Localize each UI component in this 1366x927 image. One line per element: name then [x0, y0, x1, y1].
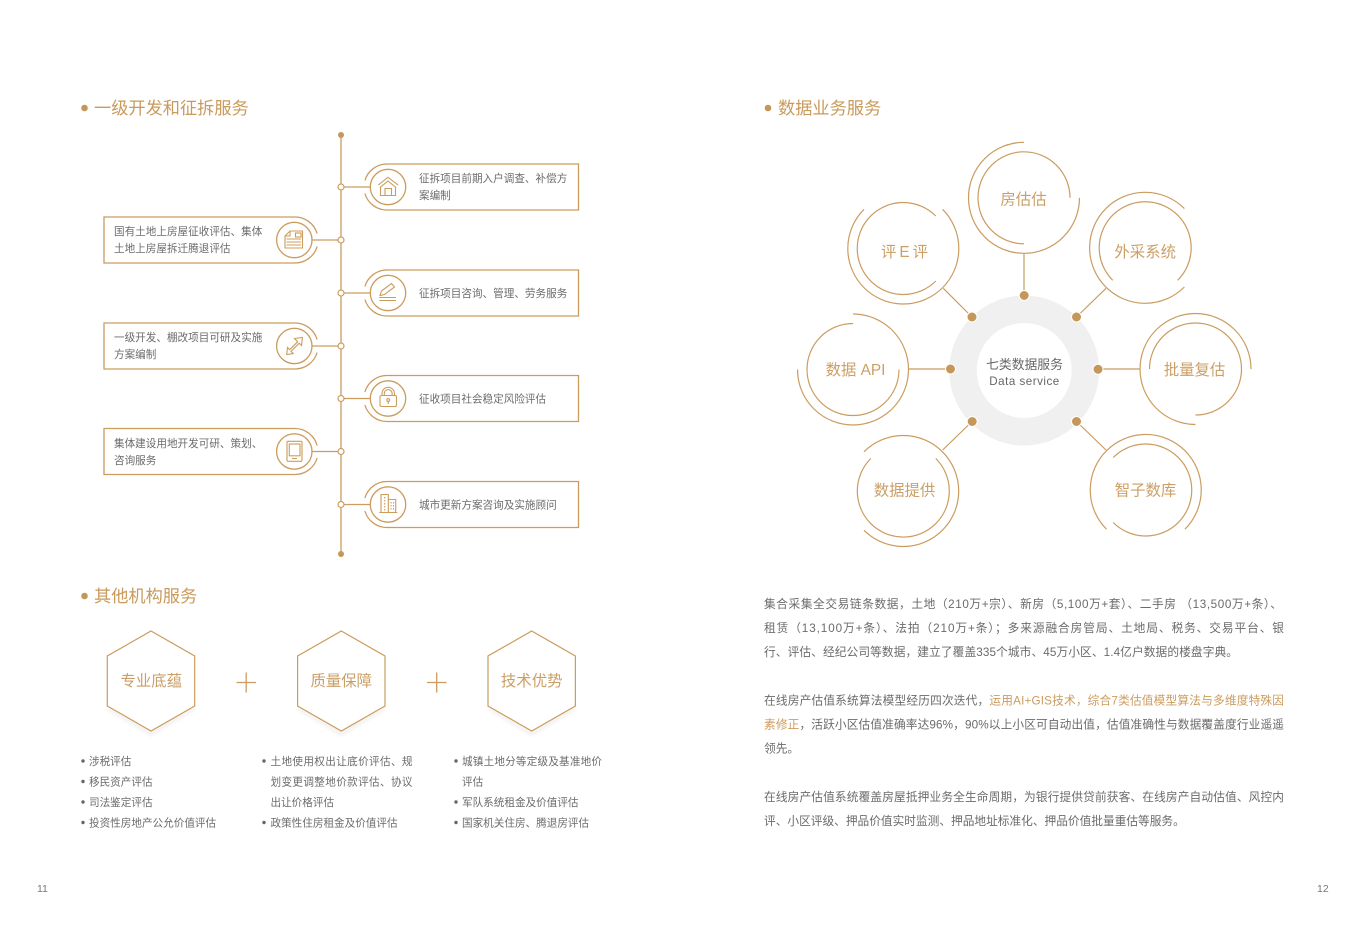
hexagon: 质量保障: 质量保障 [311, 672, 372, 690]
text block: mortgage lifecycle [764, 790, 1284, 828]
card: survey [338, 164, 578, 210]
connector dots [946, 290, 1103, 426]
node: 外采系统: 外采系统 [1114, 243, 1176, 261]
text block: valuation algorithm [764, 694, 1284, 756]
icon: house [378, 177, 398, 196]
page number 12: 12 [1317, 883, 1329, 895]
card: risk assessment [338, 375, 578, 422]
node: 房估估: 房估估 [1000, 190, 1047, 208]
icon: document [285, 231, 302, 248]
connector lines [908, 253, 1140, 450]
node: 数据提供 [857, 436, 959, 547]
diagram: seven data services [798, 142, 1251, 547]
node: 房估估 [968, 142, 1080, 253]
hub ring: 七类数据服务 [986, 357, 1063, 372]
node: 外采系统 [1090, 192, 1191, 303]
text block: data coverage [764, 597, 1284, 659]
list: column two: 出让价格评估 [270, 796, 334, 809]
text block: valuation algorithm: 领先。 [764, 742, 799, 756]
card: collective land [104, 428, 344, 475]
card: land acquisition evaluation: 国有土地上房屋征收评估、集体 [114, 225, 263, 238]
card: survey: 案编制 [419, 189, 451, 202]
list: column three: 军队系统租金及价值评估 [462, 796, 579, 809]
card: urban renewal: 城市更新方案咨询及实施顾问 [419, 498, 557, 512]
hexagon: 技术优势 [488, 631, 575, 736]
list: column two: 政策性住房租金及价值评估 [270, 816, 398, 830]
text block: data coverage: 集合采集全交易链条数据，土地（210万+宗）、新房（5,100万+套）、二手房 （13,500万+条）、 [764, 597, 1282, 611]
hexagon: 质量保障 [298, 631, 385, 736]
node: 数据API: 数据 API [826, 361, 885, 379]
card: collective land: 咨询服务 [114, 454, 157, 467]
card: urban renewal [338, 482, 578, 528]
text block: valuation algorithm: 在线房产估值系统算法模型经历四次迭代，运用AI+GIS技术，综合7类估值模型算法与多维度特殊因 [764, 694, 1284, 708]
icon: buildings [379, 494, 397, 512]
text block: data coverage: 行、评估、经纪公司等数据，建立了覆盖335个城市、45万小区、1.4亿户数据的楼盘字典。 [764, 645, 1238, 659]
heading: 一级开发和征拆服务: 一级开发和征拆服务 [94, 98, 249, 118]
node: 智子数库: 智子数库 [1115, 482, 1176, 500]
node: 批量复估 [1140, 314, 1251, 424]
card: risk assessment: 征收项目社会稳定风险评估 [419, 392, 547, 406]
icon: plus [427, 672, 446, 692]
text block: mortgage lifecycle: 评、小区评级、押品价值实时监测、押品地址标准化、押品价值批量重估等服务。 [764, 814, 1185, 828]
icon: double arrow [287, 338, 302, 354]
list: column two [262, 755, 413, 830]
list: column three: 评估 [462, 776, 484, 788]
list: column three: 国家机关住房、腾退房评估 [462, 816, 590, 830]
node: 批量复估: 批量复估 [1164, 361, 1225, 379]
card: land acquisition evaluation: 土地上房屋拆迁腾退评估 [114, 242, 231, 255]
hexagon: 专业底蕴 [107, 631, 195, 736]
text block: mortgage lifecycle: 在线房产估值系统覆盖房屋抵押业务全生命周期，为银行提供贷前获客、在线房产自动估值、风控内 [764, 790, 1284, 804]
text block: valuation algorithm: 素修正，活跃小区估值准确率达96%，90%以上小区可自动出值，估值准确性与数据覆盖度行业遥遥 [764, 718, 1284, 732]
card: consulting: 征拆项目咨询、管理、劳务服务 [419, 287, 568, 300]
heading: 其他机构服务: 其他机构服务 [94, 586, 197, 606]
list: column two: 土地使用权出让底价评估、规 [270, 755, 413, 768]
node: 数据提供: 数据提供 [874, 482, 935, 500]
card: feasibility study [104, 323, 344, 369]
card: land acquisition evaluation [104, 217, 344, 263]
timeline spine [338, 132, 344, 557]
text block: data coverage: 租赁（13,100万+条）、法拍（210万+条）；多来源融合房管局、土地局、税务、交易平台、银 [764, 621, 1284, 635]
node: 评E评 [848, 202, 959, 304]
heading: 数据业务服务: 数据业务服务 [778, 98, 881, 118]
card: consulting [338, 270, 578, 316]
node: 智子数库 [1090, 434, 1201, 536]
card: collective land: 集体建设用地开发可研、策划、 [114, 437, 262, 450]
list: column three [454, 755, 602, 830]
list: column one: 移民资产评估 [89, 776, 153, 788]
icon: lock [380, 387, 396, 406]
list: column three: 城镇土地分等定级及基准地价 [462, 755, 602, 768]
icon: pen [379, 284, 396, 300]
icon: plus [236, 672, 256, 692]
icon: tablet [287, 441, 302, 461]
list: column one: 涉税评估 [89, 755, 132, 768]
card: feasibility study: 一级开发、棚改项目可研及实施 [114, 331, 263, 344]
page number 11: 11 [37, 883, 48, 895]
timeline: primary development services [104, 132, 578, 557]
hub ring: Data service [989, 375, 1060, 388]
list: column one [81, 755, 217, 830]
list: column two: 划变更调整地价款评估、协议 [270, 776, 413, 788]
card: survey: 征拆项目前期入户调查、补偿方 [419, 172, 567, 185]
list: column one: 司法鉴定评估 [89, 796, 153, 809]
hexagon: 技术优势: 技术优势 [501, 672, 562, 690]
card: feasibility study: 方案编制 [114, 348, 156, 361]
hub ring [963, 309, 1085, 432]
list: column one: 投资性房地产公允价值评估 [89, 816, 217, 830]
node: 数据API [798, 314, 908, 425]
hexagon: 专业底蕴: 专业底蕴 [121, 672, 182, 690]
node: 评E评: 评 E 评 [881, 243, 928, 261]
